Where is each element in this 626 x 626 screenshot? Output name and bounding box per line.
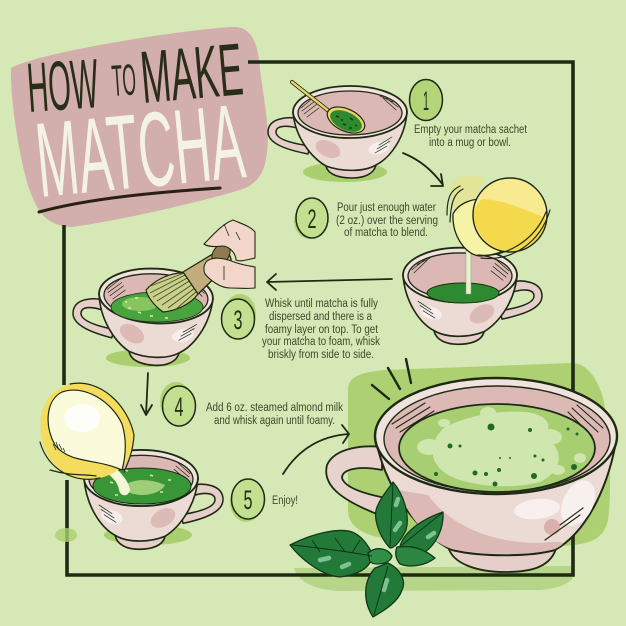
step 2 badge: 2: [308, 204, 316, 234]
title panel: MATCHA: [31, 82, 249, 220]
cup shadow: [104, 525, 192, 545]
heading: how to make: TO: [110, 55, 138, 106]
leaf veins: [292, 484, 442, 615]
step 1 badge: [410, 80, 442, 120]
step 3 badge: 3: [234, 305, 242, 335]
handle: [326, 446, 386, 516]
matcha latte: [399, 404, 595, 492]
step 3 badge: [222, 294, 256, 339]
step 4 text: and whisk again until foamy.: [214, 415, 335, 427]
matcha foam liquid: [111, 292, 203, 322]
ground shadow: [294, 566, 574, 591]
title underline: [39, 188, 220, 212]
step 3 text: dispersed and there is a: [269, 311, 373, 323]
body highlights: [513, 497, 561, 521]
step 3 text: briskly from side to side.: [268, 349, 374, 361]
title panel: [11, 27, 268, 227]
step 1 illustration: [268, 82, 407, 182]
step 2 badge: [294, 198, 328, 239]
matcha liquid: [427, 283, 499, 303]
heading: how to make: HOW: [25, 44, 101, 127]
rim hatching: [392, 403, 603, 540]
bamboo whisk: [146, 240, 234, 312]
arrow: step 2 to 3: [267, 274, 392, 290]
centre leaf: [368, 549, 392, 564]
step 1 badge: 1: [423, 86, 429, 116]
motion ticks: [372, 359, 411, 399]
foot: [448, 545, 557, 572]
step 4 text: [206, 402, 343, 427]
step 4 badge: 4: [174, 392, 184, 422]
step 3 text: foamy layer on top. To get: [265, 324, 379, 336]
water bowl: [447, 176, 550, 259]
step 5 badge: [230, 479, 264, 522]
small right leaf: [396, 547, 435, 566]
step 4 illustration: [40, 383, 223, 549]
panel background: [11, 27, 268, 227]
arrow: step 3 to 4: [141, 373, 152, 415]
spoon: [292, 82, 369, 138]
top leaf: [376, 482, 407, 548]
final big cup: [326, 378, 617, 572]
milk pitcher: [40, 383, 134, 479]
mug: [84, 450, 223, 549]
step 2 text: (2 oz.) over the serving: [336, 215, 438, 227]
step 5 text: Enjoy!: [272, 495, 298, 507]
step 2 text: [336, 202, 438, 239]
matcha liquid: [93, 468, 191, 504]
step 4 text: Add 6 oz. steamed almond milk: [206, 402, 343, 414]
mug: [268, 86, 407, 178]
step 1 text: Empty your matcha sachet: [414, 124, 528, 136]
cup body: [375, 436, 617, 555]
right leaf: [400, 512, 443, 552]
step 3 illustration: [70, 220, 255, 368]
step 3 text: Whisk until matcha is fully: [265, 298, 378, 310]
mint sprig: [290, 482, 443, 617]
matcha specks: [434, 424, 578, 486]
step 2 text: Pour just enough water: [337, 202, 436, 214]
big cup green backdrop: [348, 363, 610, 546]
cup shadow: [303, 162, 387, 182]
interior: [384, 386, 610, 492]
arrow: step 1 to 2: [403, 153, 443, 186]
frame line: [64, 62, 573, 575]
step 1 text: into a mug or bowl.: [429, 137, 511, 149]
leaf highlights: [320, 499, 434, 590]
foam: [417, 407, 586, 486]
step 4 badge: [160, 382, 196, 426]
step 3 text: [262, 298, 380, 361]
step 1 text: [414, 124, 528, 149]
heading: how to make: MAKE: [137, 27, 246, 119]
body shading: [398, 490, 563, 554]
bottom leaf: [366, 563, 403, 617]
hand: [204, 220, 255, 288]
step 5 badge: 5: [244, 485, 252, 515]
mug: [70, 264, 214, 368]
milk stream: [100, 462, 130, 495]
cup shadow: [106, 349, 190, 367]
step 2 illustration: [403, 176, 550, 344]
step 3 text: your matcha to foam, whisk: [262, 336, 380, 348]
mug with matcha: [403, 248, 542, 344]
left leaf: [290, 531, 373, 577]
rim: [375, 378, 617, 494]
step 2 text: of matcha to blend.: [344, 227, 428, 239]
small shadow on frame: [55, 528, 77, 542]
arrow: step 5 to final cup: [283, 425, 349, 474]
water stream: [466, 243, 471, 294]
